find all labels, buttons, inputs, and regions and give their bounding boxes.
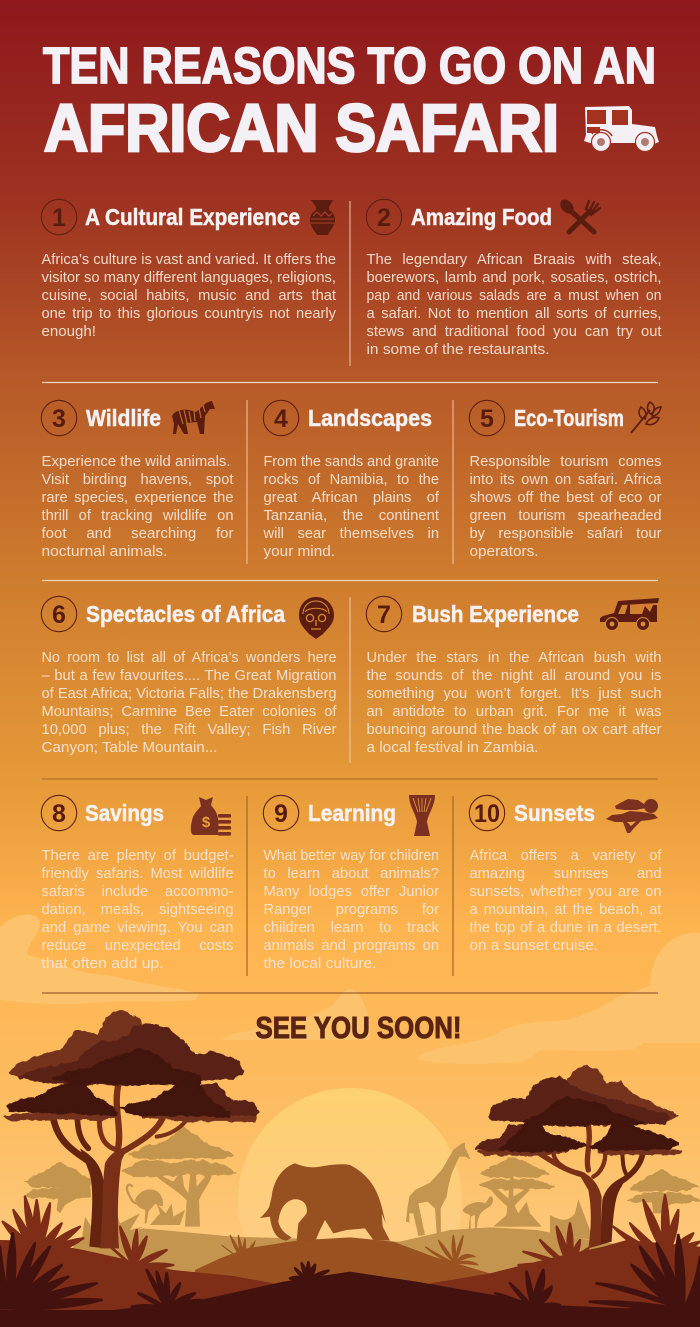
body text: [42, 847, 234, 972]
icon: fork and spoon: [558, 197, 600, 232]
heading: Savings: [85, 800, 164, 826]
number 4: [263, 400, 299, 436]
number 7: 7: [377, 601, 391, 629]
body text: a mountain, at the beach, at: [470, 901, 662, 918]
body text: [263, 453, 440, 560]
body text: the sounds of the night all around you is: [366, 667, 662, 684]
body text: on a sunset cruise.: [470, 937, 598, 954]
body text: Mountains; Carmine Bee Eater colonies of: [42, 703, 337, 720]
body text: What better way for children: [264, 847, 439, 864]
panel: 10 sunsets: [469, 795, 662, 954]
body text: of East Africa; Victoria Falls; the Drakensberg: [42, 685, 336, 702]
number 3: [41, 400, 77, 436]
body text: foot and searching for: [42, 525, 234, 542]
rust grass tufts: [3, 1195, 700, 1268]
heading: Bush Experience: [412, 601, 579, 627]
tan grass: [82, 1208, 143, 1245]
panel: 8 savings: [41, 795, 234, 972]
heading: Amazing Food: [411, 204, 552, 230]
body text: by responsible safari tour: [470, 525, 662, 542]
elephant: [260, 1163, 390, 1242]
number 4: 4: [274, 405, 288, 433]
body text: Under the stars in the African bush with: [366, 649, 662, 666]
body text: Responsible tourism comes: [470, 453, 662, 470]
panel: 3 wildlife: [41, 400, 234, 560]
number 9: [263, 795, 299, 831]
body text: rocks of Namibia, to the: [264, 471, 439, 488]
body text: 10,000 plus; the Rift Valley; Fish River: [42, 721, 336, 738]
trunk and branches: [53, 1085, 187, 1160]
number 2: [366, 199, 402, 235]
right flamingo: [463, 1196, 493, 1230]
body text: From the sands and granite: [264, 453, 439, 470]
body text: to learn about animals?: [264, 865, 439, 882]
divider: [349, 201, 351, 366]
heading: Wildlife: [86, 405, 161, 431]
number 5: 5: [480, 405, 494, 433]
body text: great African plains of: [264, 489, 440, 506]
body text: friendly safaris. Most wildlife: [42, 865, 234, 882]
number 6: [41, 596, 77, 632]
body text: in some of the restaurants.: [366, 341, 550, 358]
body text: reduce unexpected costs: [42, 937, 234, 954]
left tree: [5, 1011, 258, 1248]
closing heading: SEE YOU SOON!: [256, 1010, 462, 1045]
body text: an antidote to urban grit. For me it was: [366, 703, 662, 720]
icon: money bag: [191, 797, 231, 836]
body text: [366, 251, 662, 358]
body text: Tanzania, the continent: [264, 507, 440, 524]
body text: green tourism spearheaded: [470, 507, 662, 524]
body text: sunsets, whether you are on: [470, 883, 662, 900]
body text: thrill of tracking wildlife on: [42, 507, 234, 524]
body text: Ranger programs for: [264, 901, 439, 918]
body text: Canyon; Table Mountain...: [42, 739, 218, 756]
body text: animals and programs on: [264, 937, 439, 954]
panel: 2 amazing food: [366, 197, 662, 358]
title: AFRICAN SAFARI: [44, 91, 559, 166]
number 6: 6: [52, 601, 66, 629]
savanna scene: [0, 1011, 700, 1327]
left flamingo: [127, 1185, 137, 1203]
body text: dation, meals, sightseeing: [42, 901, 234, 918]
body text: [42, 649, 337, 756]
number 8: 8: [52, 800, 66, 828]
body text: Africa’s culture is vast and varied. It offers the: [42, 251, 336, 268]
number 1: [41, 199, 77, 235]
tan hill: [73, 1227, 633, 1283]
icon: acacia and sun: [606, 799, 658, 833]
heading: Landscapes: [308, 405, 432, 431]
icon: leaf: [631, 402, 661, 433]
number 10: 10: [474, 800, 500, 828]
body text: pap and various salads are a must when on: [366, 287, 662, 304]
giraffe: [406, 1143, 471, 1236]
body text: No room to list all of Africa’s wonders here: [42, 649, 336, 666]
body text: [366, 649, 662, 756]
icon: safari jeep: [584, 106, 659, 152]
body text: Many lodges offer Junior: [264, 883, 439, 900]
body text: the local culture.: [264, 955, 376, 972]
body text: amazing sunrises and: [470, 865, 662, 882]
number 9: 9: [274, 800, 288, 828]
number 2: 2: [377, 204, 391, 232]
sun: [238, 1088, 462, 1312]
panel: 1 cultural experience: [41, 199, 337, 340]
body text: – but a few favourites.... The Great Migration: [42, 667, 336, 684]
clouds: [0, 915, 700, 1064]
brown grass tufts: [218, 1235, 478, 1265]
number 10: [469, 795, 505, 831]
foliage: [5, 1011, 258, 1121]
title: [43, 37, 656, 166]
brown mid hill: [195, 1237, 500, 1293]
body text: Experience the wild animals.: [42, 453, 230, 470]
panel: 7 bush experience: [366, 596, 662, 756]
body text: rare species, experience the: [42, 489, 234, 506]
body text: something you won’t forget. It’s just such: [366, 685, 662, 702]
body text: visitor so many different languages, religions,: [42, 269, 336, 286]
body text: into its own on safari. Africa: [470, 471, 662, 488]
heading: Eco-Tourism: [514, 405, 624, 431]
body text: operators.: [470, 543, 538, 560]
panel: 9 learning: [263, 795, 439, 972]
number 3: 3: [52, 405, 66, 433]
body text: shows off the best of eco or: [470, 489, 662, 506]
body text: bouncing around the back of an ox cart after: [366, 721, 662, 738]
panel: 5 eco-tourism: [469, 400, 662, 560]
body text: a safari. Not to mention all sorts of curries,: [366, 305, 662, 322]
heading: A Cultural Experience: [85, 204, 300, 230]
panel: 4 landscapes: [263, 400, 440, 560]
body text: enough!: [42, 323, 96, 340]
icon: safari truck: [600, 598, 659, 630]
panel: 6 spectacles of africa: [41, 596, 337, 756]
body text: and game viewing. You can: [42, 919, 234, 936]
body text: safaris include accommo-: [42, 883, 234, 900]
icon: djembe drum: [409, 795, 435, 836]
body text: The legendary African Braais with steak,: [366, 251, 662, 268]
body text: [470, 453, 662, 560]
body text: the top of a dune in a desert,: [470, 919, 662, 936]
number 8: [41, 795, 77, 831]
icon: tribal mask: [299, 597, 334, 639]
body text: cuisine, social habits, music and arts that: [42, 287, 337, 304]
body text: [42, 251, 337, 340]
body text: that often add up.: [42, 955, 164, 972]
heading: Sunsets: [514, 800, 595, 826]
body text: [470, 847, 662, 954]
body text: will sear themselves in: [263, 525, 439, 542]
icon: zebra: [172, 401, 215, 434]
number 5: [469, 400, 505, 436]
body text: There are plenty of budget-: [42, 847, 234, 864]
body text: one trip to this glorious countryis not nearly: [42, 305, 336, 322]
heading: Learning: [308, 800, 396, 826]
number 1: 1: [52, 204, 66, 232]
dark grass tufts: [0, 1233, 700, 1310]
heading: Spectacles of Africa: [86, 601, 286, 627]
body text: children learn to track: [264, 919, 439, 936]
body text: [264, 847, 439, 972]
body text: boerewors, lamb and pork, sosaties, ostrich,: [366, 269, 662, 286]
body text: stews and traditional food you can try out: [366, 323, 662, 340]
body text: nocturnal animals.: [42, 543, 168, 560]
dark foreground ground: [0, 1272, 700, 1327]
distant trees and animals: [25, 1128, 700, 1283]
icon: vase: [310, 200, 335, 235]
number 7: [366, 596, 402, 632]
body text: a local festival in Zambia.: [366, 739, 538, 756]
body text: Africa offers a variety of: [470, 847, 662, 864]
body text: your mind.: [264, 543, 335, 560]
body text: Visit birding havens, spot: [42, 471, 234, 488]
right tree: [476, 1066, 680, 1248]
icon: money bag: $: [202, 814, 211, 831]
body text: [42, 453, 234, 560]
rust foreground hill: [0, 1240, 700, 1320]
